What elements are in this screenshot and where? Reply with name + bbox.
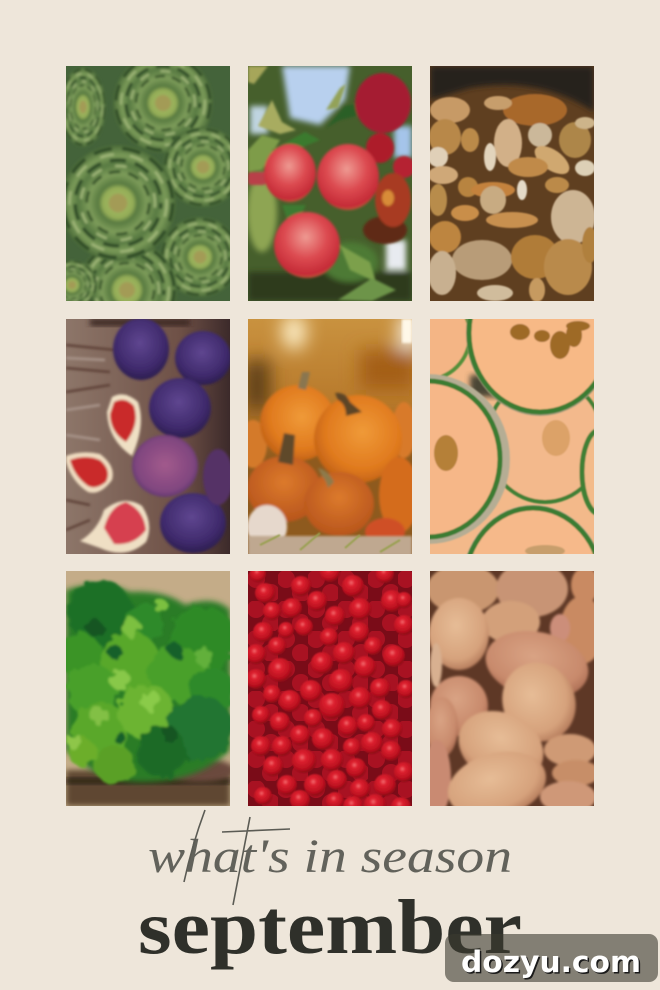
watermark: dozyu.com [461, 945, 641, 979]
panel: red currants [248, 571, 412, 806]
heading: what's in season: what's in season [148, 830, 512, 883]
panel: potatoes [430, 571, 594, 806]
watermark: dozyu.com [462, 946, 642, 980]
panel: pumpkins [248, 319, 412, 554]
heading: what's in season [148, 810, 512, 905]
watermark [445, 934, 658, 982]
panel: kale [58, 571, 236, 806]
heading: september: september [138, 884, 522, 970]
panel: artichokes [66, 66, 230, 301]
panel: figs [66, 318, 233, 554]
panel: apples [247, 66, 415, 301]
panel: chanterelle mushrooms [428, 66, 598, 302]
panel: cantaloupe [430, 319, 594, 554]
